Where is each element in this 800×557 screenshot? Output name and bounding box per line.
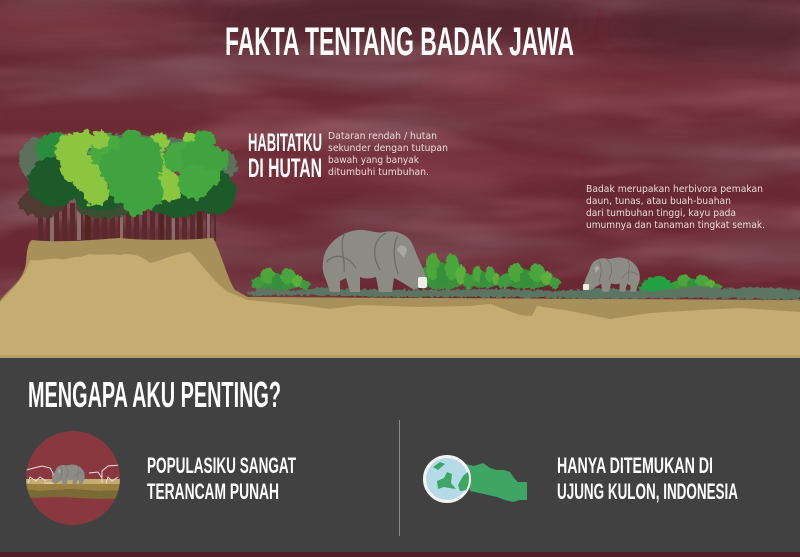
shrubs — [252, 253, 722, 295]
small rhino — [584, 257, 640, 292]
icon: endangered population — [26, 431, 120, 525]
text: endangered population — [147, 453, 296, 504]
large rhino white muzzle — [418, 277, 427, 288]
grass strip — [247, 286, 800, 300]
tree trunks — [38, 195, 216, 242]
text: habitat description: sekunder dengan tutupan — [328, 143, 448, 154]
small rhino white muzzle — [583, 284, 589, 290]
text: diet description: dari tumbuhan tinggi, kayu pada — [586, 208, 736, 219]
text: habitat description — [328, 131, 448, 178]
text: endangered population: POPULASIKU SANGAT — [147, 453, 296, 478]
text: diet description: daun, tunas, atau buah-buahan — [586, 196, 731, 207]
panel: why important — [0, 382, 800, 557]
tree canopy — [18, 130, 237, 218]
text: habitat description: ditumbuhi tumbuhan. — [328, 167, 429, 178]
heading: habitat — [248, 129, 322, 183]
sky background — [0, 0, 800, 358]
large rhino — [323, 230, 426, 292]
text: habitat description: Dataran rendah / hutan — [328, 131, 437, 142]
green mound — [638, 276, 678, 293]
text: endangered population: TERANCAM PUNAH — [147, 479, 279, 504]
text: habitat description: bawah yang banyak — [328, 155, 419, 166]
text: diet description — [586, 184, 765, 231]
heading: habitat: DI HUTAN — [248, 153, 322, 183]
icon: location map — [424, 456, 527, 502]
text: diet description: umumnya dan tanaman tingkat semak. — [586, 220, 765, 231]
forest illustration — [18, 130, 237, 242]
text: location — [557, 453, 738, 504]
heading: why important: MENGAPA AKU PENTING? — [28, 374, 281, 415]
hill and ground — [0, 238, 800, 358]
text: diet description: Badak merupakan herbivora pemakan — [586, 184, 763, 195]
heading: habitat: HABITATKU — [248, 129, 322, 157]
text: location: HANYA DITEMUKAN DI — [557, 453, 713, 478]
